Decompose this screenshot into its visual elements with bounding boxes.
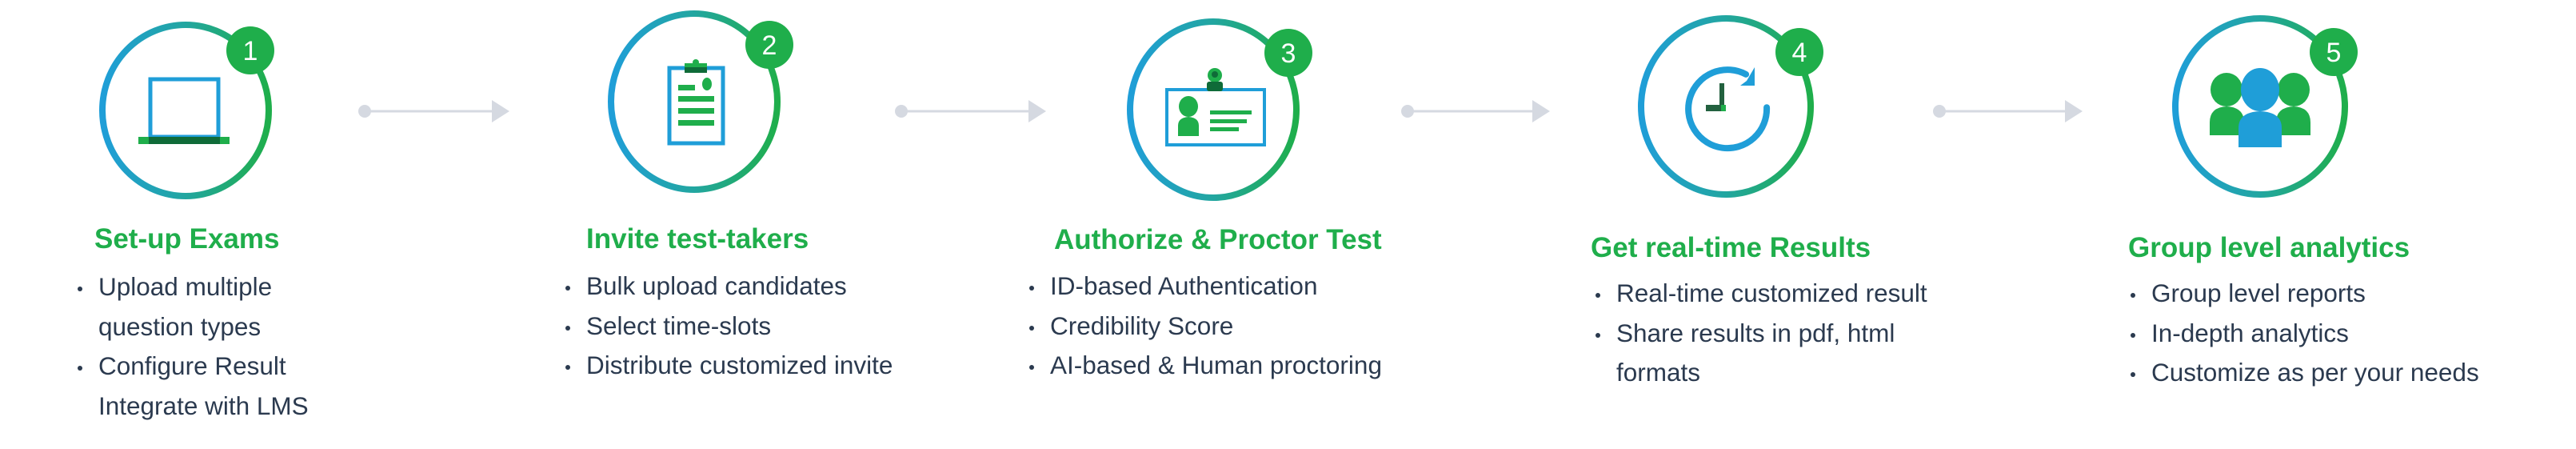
text block: step 3 bullets: ID-based Authentication (1050, 271, 1317, 300)
text block: step 2 bullets: Distribute customized invite (586, 351, 893, 379)
icon: clipboard (669, 59, 723, 143)
badge 4 (1775, 28, 1823, 76)
icon: id card (1167, 68, 1264, 145)
text block: step 2 bullets (565, 271, 893, 379)
text block: step 5 bullets: Group level reports (2151, 279, 2366, 307)
step 3 circle: authorize (1130, 22, 1312, 198)
text block: step 1 bullets: Configure Result (98, 351, 286, 380)
text block: step 2 bullets: Select time-slots (586, 311, 771, 339)
heading: step 1: Set-up Exams (94, 223, 279, 255)
heading: step 3: Authorize & Proctor Test (1054, 224, 1382, 255)
text block: step 3 bullets: Credibility Score (1050, 311, 1233, 339)
arrow 3 (1401, 100, 1550, 122)
text block: step 1 bullets: Integrate with LMS (98, 391, 309, 419)
icon: laptop (138, 79, 230, 144)
text block: step 3 bullets: AI-based & Human proctoring (1050, 351, 1382, 379)
arrow 4 (1933, 100, 2083, 122)
badge 4: 4 (1792, 38, 1807, 68)
step 2 circle: invite (611, 14, 793, 190)
step 1 circle: set-up exams (102, 25, 274, 196)
badge 5 (2310, 28, 2358, 76)
badge 3 (1264, 29, 1312, 77)
text block: step 4 bullets: formats (1616, 358, 1700, 387)
heading: step 5: Group level analytics (2128, 232, 2410, 263)
badge 5: 5 (2326, 38, 2341, 68)
text block: step 1 bullets: Upload multiple (98, 272, 272, 301)
icon: clock refresh (1673, 54, 1782, 163)
text block: step 5 bullets: Customize as per your needs (2151, 358, 2479, 387)
arrow 1 (358, 100, 509, 122)
text block: step 3 bullets (1029, 271, 1382, 379)
arrow 2 (895, 100, 1046, 122)
text block: step 2 bullets: Bulk upload candidates (586, 271, 847, 300)
text block: step 4 bullets: Real-time customized result (1616, 279, 1927, 307)
badge 1: 1 (243, 36, 258, 66)
text block: step 4 bullets (1596, 279, 1927, 387)
heading: step 2: Invite test-takers (586, 223, 809, 255)
heading: step 4: Get real-time Results (1591, 232, 1871, 263)
badge 2: 2 (762, 30, 777, 61)
badge 1 (226, 26, 274, 74)
text block: step 1 bullets: question types (98, 312, 261, 341)
step 5 circle: analytics (2175, 18, 2358, 194)
badge 2 (745, 21, 793, 69)
step 4 circle: results (1641, 18, 1823, 194)
text block: step 4 bullets: Share results in pdf, html (1616, 319, 1895, 347)
icon: group (2210, 68, 2310, 147)
text block: step 5 bullets (2131, 279, 2479, 387)
text block: step 1 bullets (78, 272, 309, 419)
text block: step 5 bullets: In-depth analytics (2151, 319, 2349, 347)
badge 3: 3 (1281, 38, 1296, 69)
